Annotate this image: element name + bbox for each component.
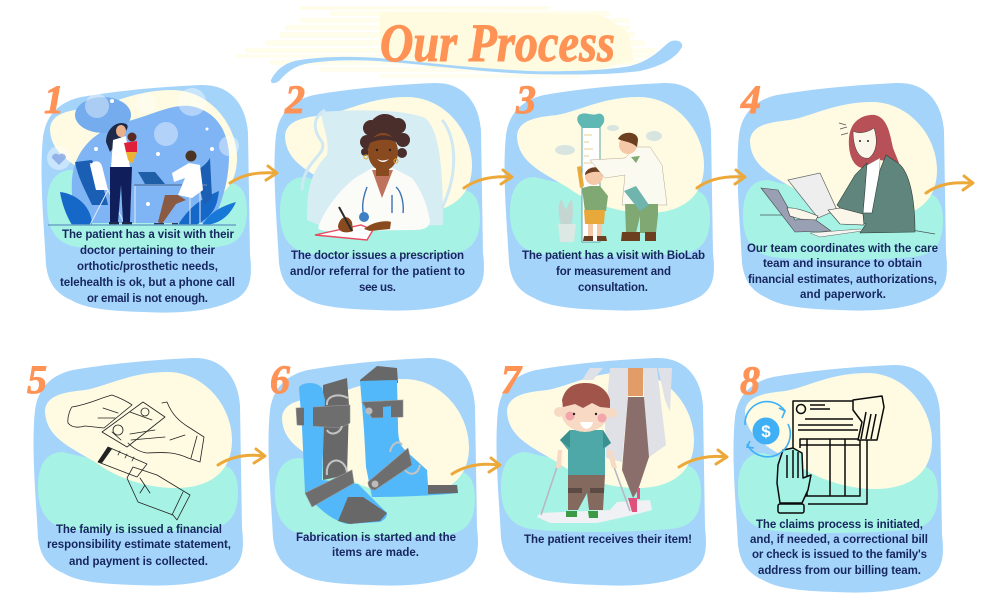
boy <box>577 166 584 188</box>
step text <box>290 250 465 294</box>
swoosh underline <box>271 40 682 83</box>
step text: and/or referral for the patient to <box>290 266 465 278</box>
step text: The family is issued a financial <box>56 524 222 536</box>
adult <box>582 368 603 380</box>
step number: 6 <box>270 357 290 402</box>
step text: items are made. <box>332 547 419 559</box>
illustration: office worker <box>760 115 935 237</box>
right brace <box>360 366 398 383</box>
clouds <box>555 125 662 155</box>
step number: 5 <box>27 357 47 402</box>
step text <box>522 250 705 294</box>
step text: responsibility estimate statement, <box>47 539 231 551</box>
panel: step 3 <box>504 77 714 311</box>
plant <box>559 200 573 225</box>
crutches <box>541 467 630 515</box>
brush stroke background <box>235 6 660 78</box>
step text: or check is issued to the family's <box>752 549 927 561</box>
step text: address from our billing team. <box>758 565 921 577</box>
shirt <box>860 158 880 213</box>
arrow 1 to 2 <box>230 166 277 183</box>
panel: step 8 <box>733 358 943 593</box>
jacket <box>837 155 915 233</box>
desk <box>134 184 207 186</box>
panel: step 6 <box>268 357 478 586</box>
step number: 1 <box>44 77 64 122</box>
arrow 6 to 7 <box>452 458 500 474</box>
coat <box>318 168 430 231</box>
step number: 8 <box>740 358 760 403</box>
step text: or email is not enough. <box>87 293 208 305</box>
step text: The patient receives their item! <box>524 534 692 546</box>
step text: financial estimates, authorizations, <box>748 274 937 286</box>
laptop <box>761 188 831 232</box>
ruler <box>582 127 600 242</box>
hair and face <box>360 114 410 158</box>
baby <box>128 132 136 142</box>
step text <box>747 243 938 301</box>
hands <box>787 208 864 225</box>
arrow 2 to 3 <box>464 170 512 188</box>
step text <box>296 532 456 559</box>
step text <box>60 229 235 305</box>
title banner <box>235 6 682 83</box>
floor shadow <box>537 500 652 523</box>
step text: The doctor issues a prescription <box>291 250 464 262</box>
panel: step 2 <box>274 77 484 311</box>
clipboard <box>315 225 373 240</box>
boy body <box>556 450 617 468</box>
step text: The patient has a visit with their <box>62 229 235 241</box>
illustration: money exchange line drawing <box>68 395 204 520</box>
step number: 4 <box>740 77 761 122</box>
step text: telehealth is ok, but a phone call <box>60 277 235 289</box>
step text: Fabrication is started and the <box>296 532 456 544</box>
paper <box>788 173 837 218</box>
step text <box>47 524 231 568</box>
title text: Our Process <box>380 13 615 73</box>
leaves <box>60 192 92 225</box>
step text: for measurement and <box>556 266 671 278</box>
step text: doctor pertaining to their <box>80 245 216 257</box>
panel: step 5 <box>27 357 243 586</box>
step text: orthotic/prosthetic needs, <box>77 261 218 273</box>
step text: The claims process is initiated, <box>756 519 923 531</box>
hair <box>849 115 899 168</box>
left brace <box>323 378 349 480</box>
face <box>853 128 876 158</box>
hands and pen <box>338 217 391 232</box>
illustration: doctor visit <box>47 88 239 225</box>
step text: The patient has a visit with BioLab <box>522 250 705 262</box>
step text: consultation. <box>578 282 648 294</box>
icon: dollar refresh: $ <box>761 422 771 441</box>
step number: 7 <box>501 357 523 402</box>
arrow 5 to 6 <box>218 449 265 465</box>
panel: step 7 <box>496 357 706 586</box>
step text: and, if needed, a correctional bill <box>750 534 928 546</box>
arrow 3 to 4 <box>697 170 745 188</box>
chair <box>75 160 108 205</box>
step number: 2 <box>284 77 305 122</box>
doctor seated <box>186 150 196 162</box>
step text: and paperwork. <box>800 289 886 301</box>
arrow 4 out <box>926 176 973 193</box>
woman <box>106 123 128 152</box>
stethoscope <box>363 187 403 216</box>
illustration: doctor writing <box>302 110 454 240</box>
step text: and payment is collected. <box>69 556 208 568</box>
step text: Our team coordinates with the care <box>747 243 938 255</box>
step number: 3 <box>515 77 536 122</box>
illustration: claims document <box>745 396 884 513</box>
step text: see us. <box>359 282 396 294</box>
illustration: child with crutches <box>537 368 672 523</box>
panel: step 4 <box>737 77 947 311</box>
step text: team and insurance to obtain <box>763 258 922 270</box>
illustration: orthotic braces <box>296 366 458 524</box>
arrow 7 to 8 <box>679 450 727 467</box>
illustration: measuring child <box>555 113 667 242</box>
step text <box>750 519 928 577</box>
doctor <box>590 147 667 205</box>
panel: step 1 <box>41 77 251 313</box>
